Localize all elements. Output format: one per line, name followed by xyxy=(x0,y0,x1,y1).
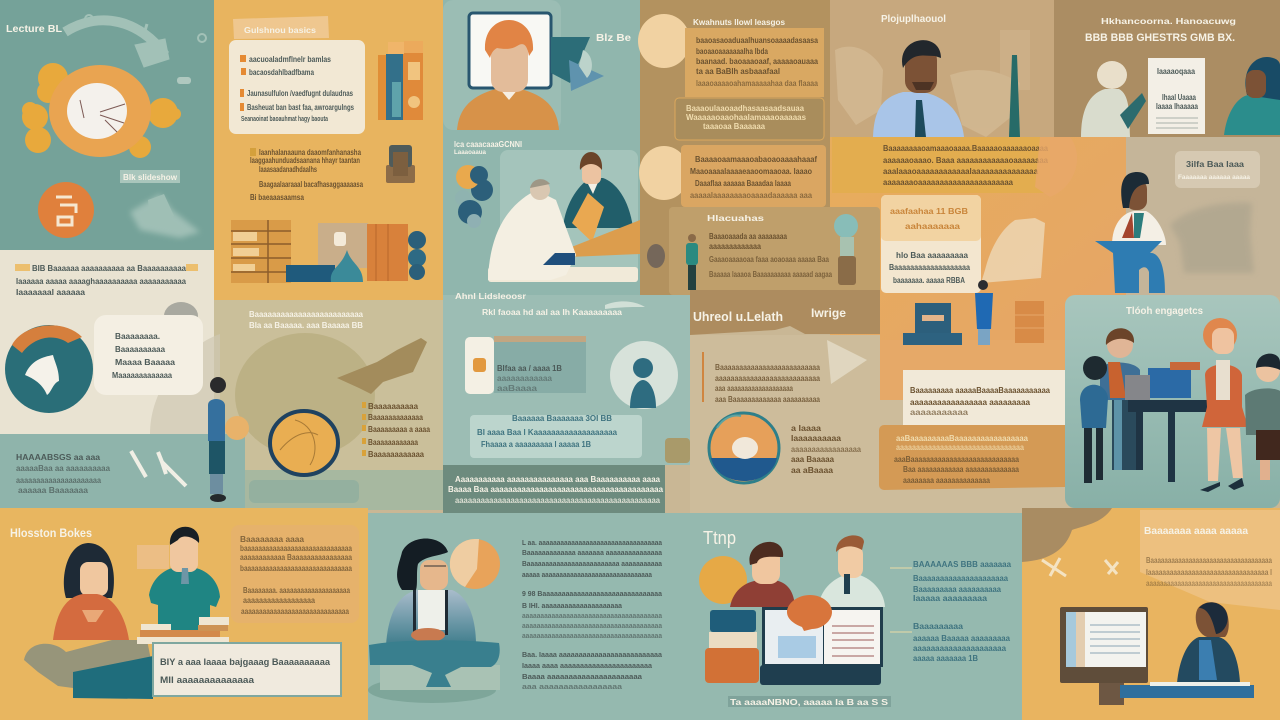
podium xyxy=(1095,241,1165,293)
bullet list: Baaaaaaaaa a aaaa xyxy=(368,425,430,434)
figure: standing person xyxy=(208,377,226,502)
text card: Jaunasulfulon /vaedfugnt dulaudnas xyxy=(247,89,353,98)
brown header: Iwrige xyxy=(811,306,846,320)
text column: aaaaa aaaaaaa 1B xyxy=(913,654,978,663)
text column: aaaaaaaaaaaaaaaaaaaaa xyxy=(913,644,1007,653)
small tab xyxy=(137,545,169,569)
desk xyxy=(1120,682,1254,698)
text box two: taaaoaa Baaaaaa xyxy=(703,122,766,131)
text block: aaaaaaaoaaaaaaaaaaaaaaaaaaaaaa xyxy=(883,178,1014,187)
text panel xyxy=(231,525,359,623)
brown blob xyxy=(1022,508,1112,562)
icon: orange ring with clock face xyxy=(22,63,181,158)
text column: L aa. aaaaaaaaaaaaaaaaaaaaaaaaaaaaaaaaaa xyxy=(522,538,663,547)
text card: bacaosdahlbadfbama xyxy=(249,68,314,77)
text box two: Waaaaaoaaohaalamaaaoaaaaas xyxy=(686,113,807,122)
light backing xyxy=(443,0,561,130)
panel: overview brown column xyxy=(638,14,880,295)
text column: aaaaaa Baaaaa aaaaaaaaa xyxy=(913,634,1011,643)
cream card: aaaaaaaaaaaaaaaaa aaaaaaaaa xyxy=(910,398,1031,407)
text block: Iaaggaahunduadsaanana hhayr taantan xyxy=(250,156,360,165)
text block: aaaaaaoaaao. Baaa aaaaaaaaaaaaoaaaaaaaa xyxy=(883,156,1049,165)
text block: Baaaaaaaaaaaaaaaaaaaaaaaaaa xyxy=(715,363,820,372)
callout card: Baaaaaa Baaaaaaa 3OI BB xyxy=(512,414,612,423)
icon: plane marks xyxy=(1042,558,1118,576)
panel inner: aaBaaaa xyxy=(497,384,538,393)
text card: Seanaoinat baoauhmat hagy baouta xyxy=(241,116,328,123)
heading: Hkhancoorna. Hanoacuwg xyxy=(1101,17,1236,26)
callout box: MIl aaaaaaaaaaaaaa xyxy=(160,675,255,685)
heading: Rkl faoaa hd aal aa Ih Kaaaaaaaaa xyxy=(482,308,623,317)
text box three: aaaaalaaaaaaaaoaaaadaaaaaa aaa xyxy=(690,191,813,200)
tab heading: Gulshnou basics xyxy=(244,26,317,35)
icon: books xyxy=(137,617,229,644)
card: hlo Baa aaaaaaaaa xyxy=(896,251,969,260)
figure: woman xyxy=(1224,57,1280,135)
icon: dark blue box xyxy=(903,303,962,345)
icon: teal circle xyxy=(5,325,93,413)
faded shape xyxy=(1170,203,1254,273)
heading xyxy=(1085,17,1236,44)
text column: Iaaaa aaaa aaaaaaaaaaaaaaaaaaaaaaa xyxy=(522,661,653,670)
text block: Baaaaaaaaoamaaaoaaaa.Baaaaaoaaaaaaoaaaa xyxy=(883,144,1048,153)
text column xyxy=(890,560,1012,663)
splash icon xyxy=(981,218,1045,283)
text card: Basheuat ban bast faa, awroargulngs xyxy=(247,103,354,112)
text block: Iaanhalanaauna daaomfanhanasha xyxy=(259,148,361,157)
icon: crate xyxy=(1015,301,1044,343)
caption xyxy=(728,696,891,707)
speech bubble: Baaaaaaaa. xyxy=(115,332,160,341)
text block xyxy=(15,264,198,297)
soft triangle xyxy=(827,340,867,384)
heading: BIa aa Baaaaa. aaa Baaaaa BB xyxy=(249,321,363,330)
heading: Lecture BL xyxy=(6,24,62,35)
text column xyxy=(522,538,663,691)
speech pill: Faaaaaaa aaaaaa aaaaa xyxy=(1178,174,1250,181)
speech bubble: Maaaaaaaaaaaaa xyxy=(112,371,173,380)
icon: books xyxy=(378,41,423,120)
orange card: aaaaaaaaaaaaaaaaaaaaaaaaaaaaaaaa xyxy=(896,443,1024,452)
cream card xyxy=(903,370,1065,425)
callout card: Fhaaaa a aaaaaaaaa l aaaaa 1B xyxy=(481,440,591,449)
text box one: baaoasaoaduaalhuansoaaaadasaasa xyxy=(696,36,818,45)
icon: teal tower xyxy=(1009,55,1020,137)
text box three: Baaaaoaamaaaoabaoaoaaaahaaaf xyxy=(695,155,817,164)
icon: olive shape xyxy=(337,338,427,394)
figure: teacher xyxy=(1112,172,1166,245)
lower text panel: Hlacuahas xyxy=(707,214,765,223)
lower text panel: Gaaaoaaaaoaa faaa aoaoaaa aaaaa Baa xyxy=(709,255,829,264)
band xyxy=(832,137,1050,193)
text block: aaaaaBaa aa aaaaaaaaaa xyxy=(16,464,111,473)
text column: Iaaaaa aaaaaaaaa xyxy=(913,594,988,603)
text block: aaa Baaaaaaaaaaaaa aaaaaaaaaa xyxy=(715,395,820,404)
text box three: Daaaflaa aaaaaa Baaadaa Iaaaa xyxy=(695,179,791,188)
text block: lca caaacaaaGCNNI xyxy=(454,140,522,149)
icon: orange badge xyxy=(38,182,94,238)
icon: held ball xyxy=(225,416,249,440)
figure: man in teal xyxy=(149,527,220,631)
text box one: baanaad. baoaaaoaaf, aaaaaoauaaa xyxy=(696,57,818,66)
heading: Hlosston Bokes xyxy=(10,526,92,540)
text column: aaaaaaaaaaaaaaaaaaaaaaaaaaaaaaaaaaaaaa xyxy=(522,633,662,640)
orange card: aaaBaaaaaaaaaaaaaaaaaaaaaaaaaaaa xyxy=(894,455,1019,464)
tab xyxy=(665,438,690,463)
panel: speaker with map xyxy=(835,14,1030,137)
text column: Baa. Iaaaa aaaaaaaaaaaaaaaaaaaaaaaaaa xyxy=(522,650,663,659)
panel inner: BIfaa aa / aaaa 1B xyxy=(497,364,562,373)
illustration: consultation xyxy=(488,150,640,282)
icon: orange bubble xyxy=(787,595,832,631)
dark band: aaaaaaaaaaaaaaaaaaaaaaaaaaaaaaaaaaaaaaaaaaaaaaaa xyxy=(455,496,661,505)
text box one: Kwahnuts llowl leasgos xyxy=(693,18,786,27)
light text panel: Baaaaaaa aaaa aaaaa xyxy=(1144,526,1248,537)
lower text panel xyxy=(669,207,880,295)
bullet list: Baaaaaaaaaaaa xyxy=(368,450,425,459)
text block: Laaaoaaua xyxy=(454,150,487,156)
panel: presenting document xyxy=(1081,17,1280,137)
text card: aacuoaladmflnelr bamlas xyxy=(249,55,331,64)
text panel: aaaaaaaaaaaa Baaaaaaaaaaaaaaaa xyxy=(240,553,352,562)
heading: Tlóoh engagetcs xyxy=(1126,306,1203,317)
faded disc xyxy=(235,333,375,457)
text column: Baaaaaaaaa xyxy=(913,622,964,631)
text block xyxy=(454,140,522,156)
label: Blz Be xyxy=(596,33,632,44)
decorative stone xyxy=(164,302,198,330)
icon: book stack xyxy=(705,610,759,683)
text column: 9 98 Baaaaaaaaaaaaaaaaaaaaaaaaaaaaaaa xyxy=(522,589,663,598)
tab heading xyxy=(233,16,329,39)
text block: aaalaaaoaaaaaaaaaaaalaaaaaaaaaaaaaaa xyxy=(883,167,1039,176)
panel: globe and learning intro xyxy=(6,15,206,238)
figure: child right xyxy=(1245,354,1280,480)
brown header: Uhreol u.Lelath xyxy=(693,309,783,324)
text block: HAAAABSGS aa aaa xyxy=(16,453,101,462)
swoosh xyxy=(605,301,645,309)
icon: stone xyxy=(647,244,665,268)
text column: Baaaa aaaaaaaaaaaaaaaaaaaaaa xyxy=(522,672,643,681)
light text panel xyxy=(1140,510,1280,610)
panel: portrait and mentoring xyxy=(443,0,640,282)
icon: round avatar xyxy=(610,341,678,409)
panel: book list xyxy=(229,16,426,283)
text box one: ta aa BaBlh asbaaafaal xyxy=(696,67,780,76)
soft arc xyxy=(150,334,220,434)
orange card: aaBaaaaaaaaaBaaaaaaaaaaaaaaaaa xyxy=(896,434,1029,443)
card: baaaaaaa. aaaaa RBBA xyxy=(893,276,965,285)
icon: triangles xyxy=(551,37,604,91)
icon: bubbles xyxy=(455,165,493,228)
panel: laptop pair xyxy=(699,528,1012,707)
callout box: BIY a aaa Iaaaa bajgaaag Baaaaaaaaaa xyxy=(160,657,331,667)
text column: aaaaaaaaaaaaaaaaaaaaaaaaaaaaaaaaaaaaaa xyxy=(522,613,662,620)
callout: BIk slideshow xyxy=(123,173,178,182)
icon: pill card xyxy=(465,337,494,394)
text column: Baaaaaaaaa aaaaaaaaaa xyxy=(913,585,1002,594)
heading: Plojuplhaouol xyxy=(881,14,946,25)
speech bubble: Maaaa Baaaaa xyxy=(115,358,176,367)
panel: desk and monitor xyxy=(1022,508,1280,705)
orange card: aaaaaaaa aaaaaaaaaaaaaa xyxy=(903,476,990,485)
orange card xyxy=(879,425,1065,490)
text panel: aaaaaaaaaaaaaaaaaaaaaaaaaaaaaa xyxy=(241,607,349,616)
swirl decoration xyxy=(65,15,206,84)
text column: Baaaaaaaaaaaaaaaaaaaaa xyxy=(913,574,1009,583)
text block: Bi baeaaasaamsa xyxy=(250,193,304,202)
panel: orange statement xyxy=(832,137,1077,345)
bullet list: Baaaaaaaaaaaaa xyxy=(368,413,423,422)
text block: aaaaaa Baaaaaaa xyxy=(18,486,89,495)
text list: aaaaaaaaaaaaaaaaa xyxy=(791,445,862,454)
text block: aaaaaaaaaaaaaaaaaaaaaaaaaaa xyxy=(715,374,820,383)
document xyxy=(1148,58,1205,134)
map backdrop xyxy=(835,30,1030,137)
text panel: aaaaaaaaaaaaaaaaaa xyxy=(243,596,315,605)
figure: seated person xyxy=(1081,61,1146,137)
lower text panel: Baaaoaaada aa aaaaaaaa xyxy=(709,232,787,241)
card: aaafaahaa 11 BGB xyxy=(890,207,968,216)
soft splash xyxy=(1035,137,1077,197)
document: Ihaal Uaaaa xyxy=(1162,93,1196,102)
card: Baaaaaaaaaaaaaaaaaaa xyxy=(889,263,970,272)
text box one xyxy=(685,18,824,97)
figure: woman in orange xyxy=(24,543,153,699)
laptop and table xyxy=(1125,362,1208,482)
faded icon xyxy=(130,194,200,238)
callout box xyxy=(153,643,341,696)
text box one: baoaaoaaaaaaalha Ibda xyxy=(696,47,768,56)
text column: Baaaaaaaaaaaaaaaaaaaaaaaaa aaaaaaaaaaa xyxy=(522,559,663,568)
card xyxy=(881,195,981,293)
figure: person in blue xyxy=(975,280,993,345)
icon: navy framed globe xyxy=(270,411,338,475)
icon: monitor xyxy=(1060,607,1148,705)
brown header xyxy=(690,290,880,335)
document: Iaaaa Ihaaaaa xyxy=(1156,102,1198,111)
text box two: Baaaoulaaoaadhasaasaadsauaa xyxy=(686,104,805,113)
text block: aaa aaaaaaaaaaaaaaaaaaa xyxy=(715,384,793,393)
text column: aaaaa aaaaaaaaaaaaaaaaaaaaaaaaaaaaaaa xyxy=(522,570,653,579)
figure: man in blue shirt xyxy=(873,40,964,137)
speech pill: 3ilfa Baa laaa xyxy=(1186,160,1245,169)
bullet list: Baaaaaaaaaaaa xyxy=(368,438,418,447)
text block: Iaaaaaa aaaaa aaaaghaaaaaaaaaa aaaaaaaaaaa xyxy=(16,277,187,286)
text column: Baaaaaaaaaaaaa aaaaaaa aaaaaaaaaaaaaaa xyxy=(522,548,663,557)
heading: BBB BBB GHESTRS GMB BX. xyxy=(1085,32,1235,44)
text list: aaa Baaaaa xyxy=(791,455,835,464)
figure: woman in orange xyxy=(1200,318,1248,492)
text card xyxy=(229,40,365,134)
figure: man in vest xyxy=(1100,328,1142,470)
text block: aaaaaaaaaaaaaaaaaaaaa xyxy=(16,476,101,485)
illustration: library xyxy=(231,220,426,283)
figure: child left xyxy=(1080,356,1108,483)
bullet list: Baaaaaaaaaa xyxy=(368,402,419,411)
cream card: Baaaaaaaaa aaaaaBaaaaBaaaaaaaaaaa xyxy=(910,386,1051,395)
speech bubble: Baaaaaaaaaa xyxy=(115,345,166,354)
panel: person at globe xyxy=(208,310,430,503)
text block xyxy=(250,148,363,202)
panel: group at table xyxy=(1065,295,1280,508)
text block: Iaaaaaaal aaaaaa xyxy=(16,288,86,297)
panel inner xyxy=(494,336,586,393)
icon: dark book xyxy=(386,145,415,183)
speech pill xyxy=(1175,151,1260,188)
callout card: BI aaaa Baa l Kaaaaaaaaaaaaaaaaaaa xyxy=(477,428,618,437)
panel: centre tan xyxy=(690,290,1065,490)
dark band xyxy=(443,465,665,513)
text block: Iaaasaadanadhdaalhs xyxy=(259,165,317,174)
text block xyxy=(883,144,1049,187)
text column: B IHI. aaaaaaaaaaaaaaaaaaaaa xyxy=(522,601,623,610)
text box three xyxy=(681,145,826,207)
panel: meditating reader xyxy=(368,538,663,703)
text box two xyxy=(675,98,824,140)
caption: Ta aaaaNBNO, aaaaa Ia B aa S S xyxy=(730,698,889,707)
panel: teacher at podium xyxy=(1095,151,1260,293)
callout xyxy=(120,170,180,183)
figure: man with brown hair xyxy=(730,542,795,607)
text block xyxy=(702,352,820,404)
text block xyxy=(16,453,111,495)
icon: hourglass xyxy=(834,214,858,285)
pie icon xyxy=(699,556,747,604)
text block: BIB Baaaaaa aaaaaaaaaa aa Baaaaaaaaaa xyxy=(32,264,187,273)
figure: man with tie xyxy=(818,535,885,607)
card: aahaaaaaaa xyxy=(905,222,961,231)
orange card: Baa aaaaaaaaaaaa aaaaaaaaaaaaaa xyxy=(903,465,1019,474)
icon: island emblem xyxy=(709,413,779,483)
heading: Baaaaaaaaaaaaaaaaaaaaaaaaa xyxy=(249,310,364,319)
text column: BAAAAAAS BBB aaaaaaa xyxy=(913,560,1012,569)
icon: balloon top xyxy=(638,14,690,68)
figure: seated woman xyxy=(1177,602,1240,683)
document: Iaaaaoqaaa xyxy=(1157,67,1195,76)
dark band: Baaaa Baa aaaaaaaaaaaaaaaaaaaaaaaaaaaaaaaaaaaaaaa xyxy=(448,485,664,494)
dark band: Aaaaaaaaaaa aaaaaaaaaaaaaaa aaa Baaaaaaaaaa aaaa xyxy=(455,475,661,484)
text column: aaaaaaaaaaaaaaaaaaaaaaaaaaaaaaaaaaaaaa xyxy=(522,623,662,630)
lower text panel: aaaaaaaaaaaaa xyxy=(709,242,761,251)
stone plinth xyxy=(249,480,359,503)
icon: balloon lower xyxy=(639,146,689,200)
pie icon xyxy=(450,539,500,589)
text list: aa aBaaaa xyxy=(791,466,834,475)
cream card: aaaaaaaaaaa xyxy=(910,408,969,417)
text panel: baaaaaaaaaaaaaaaaaaaaaaaaaaaaaa xyxy=(240,564,352,573)
heading: Ttnp xyxy=(703,528,736,548)
panel inner: aaaaaaaaaaaa xyxy=(497,374,553,383)
panel: study pair xyxy=(10,525,359,699)
text list: Iaaaaaaaaaa xyxy=(791,434,842,443)
text box one: laaaoaaaaoahamaaaaahaa daa flaaaa xyxy=(696,79,818,88)
heading xyxy=(455,292,623,317)
bullet list xyxy=(362,402,430,459)
text panel: Baaaaaaaa. aaaaaaaaaaaaaaaaaaaa xyxy=(243,586,350,595)
icon: white marks xyxy=(131,451,186,486)
text box three: Maaoaaaalaaaaeaaoomaaoaa. Iaaao xyxy=(690,167,812,176)
heading xyxy=(249,310,364,330)
text list xyxy=(791,424,862,475)
panel: circle diagram with bubble xyxy=(5,264,220,434)
card xyxy=(1065,295,1280,508)
callout card xyxy=(470,414,642,458)
text list: a Iaaaa xyxy=(791,424,822,433)
figure: small person xyxy=(686,234,698,290)
portrait frame xyxy=(457,13,559,130)
lower text panel: Baaaaa laaaoa Baaaaaaaaaa aaaaad aagaa xyxy=(709,270,832,279)
text panel: baaaaaaaaaaaaaaaaaaaaaaaaaaaaaa xyxy=(240,544,352,553)
text column: aaa aaaaaaaaaaaaaaaaa xyxy=(522,684,622,691)
text block: Baagaalaaraaal bacafhasaggaaaaasa xyxy=(259,180,363,189)
speech bubble xyxy=(94,315,203,395)
panel: teal note strip xyxy=(16,451,186,495)
icon: laptop xyxy=(760,607,883,685)
figure: seated woman xyxy=(368,538,500,703)
heading: Ahnl Lidsleoosr xyxy=(455,292,526,301)
panel: centre teal xyxy=(443,292,690,513)
text panel: Baaaaaaaa aaaa xyxy=(240,535,305,544)
